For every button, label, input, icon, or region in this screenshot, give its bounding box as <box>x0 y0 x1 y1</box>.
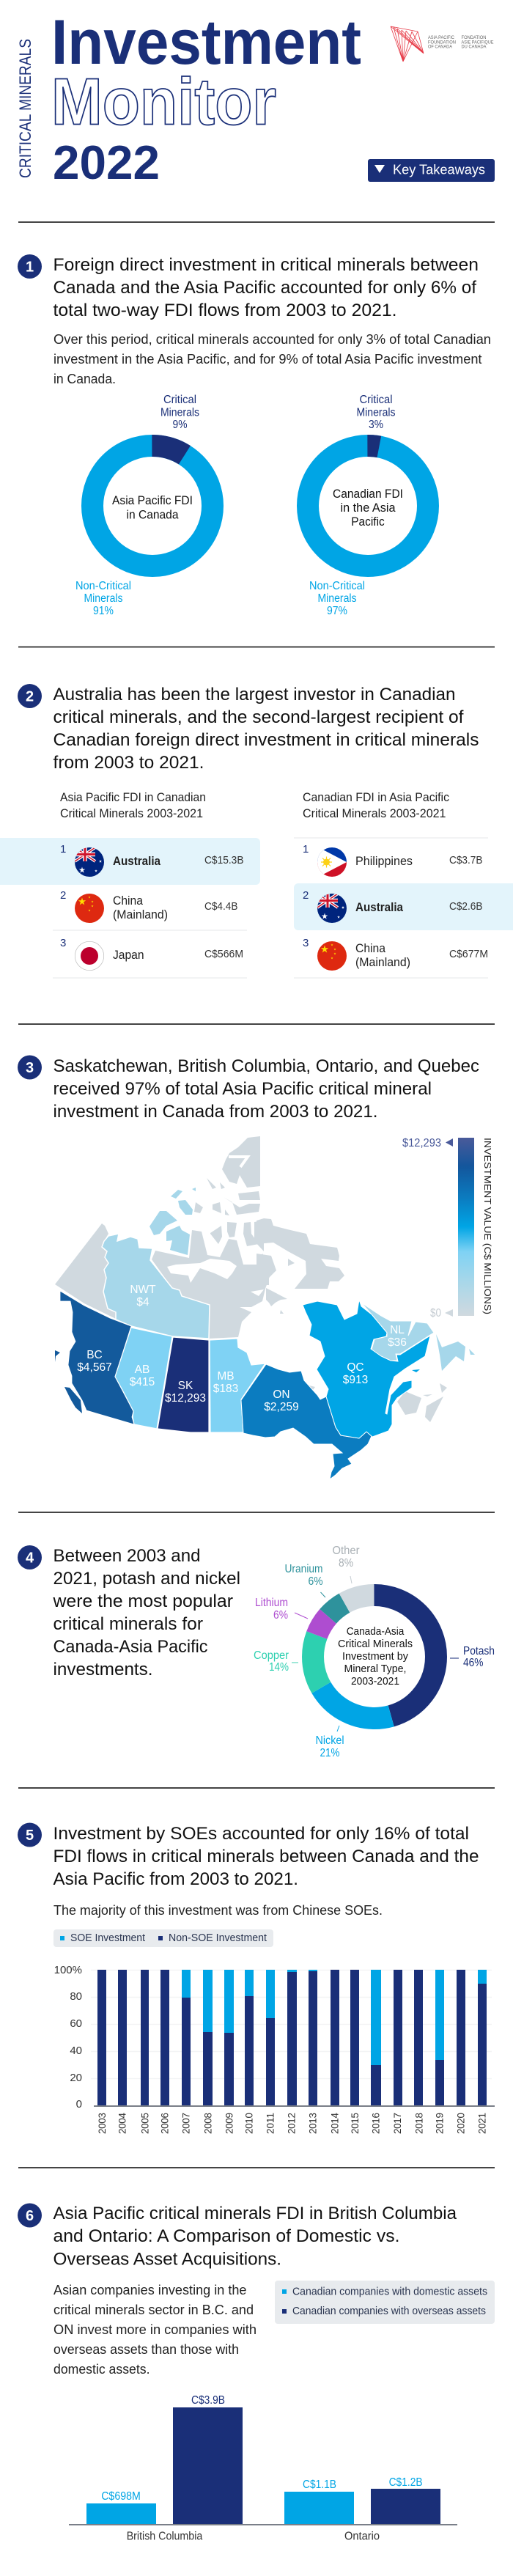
province: Alberta <box>115 1328 172 1429</box>
label: other: 8% <box>339 1557 353 1569</box>
heading 5: FDI flows in critical minerals between Canada and the <box>53 1847 479 1866</box>
map value labels: QC <box>347 1361 364 1374</box>
heading 3 <box>53 1056 479 1122</box>
ranking table: Asia Pacific FDI in Canadian critical minerals: C$15.3B <box>204 854 243 866</box>
stacked bar chart: SOE share by year: 2015 <box>350 2113 361 2134</box>
number badge 3: 3 <box>26 1060 34 1076</box>
province: Ontario <box>241 1364 372 1479</box>
heading 1: total two-way FDI flows from 2003 to 2021. <box>53 301 397 320</box>
label: uranium: Uranium <box>284 1563 322 1575</box>
ranking table: Asia Pacific FDI in Canadian critical minerals: C$4.4B <box>204 900 237 913</box>
heading 1 <box>53 255 479 320</box>
stacked bar chart: SOE share by year: 2016 <box>371 2113 381 2134</box>
body text 6: domestic assets. <box>53 2362 150 2377</box>
heading 3: investment in Canada from 2003 to 2021. <box>53 1102 378 1122</box>
ranking table: Asia Pacific FDI in Canadian critical minerals: China <box>113 894 144 908</box>
bar chart: BC and Ontario: British Columbia <box>127 2531 203 2542</box>
ranking table: Asia Pacific FDI in Canadian critical minerals: Asia Pacific FDI in Canadian <box>60 790 206 804</box>
stacked bar chart: SOE share by year: 20 <box>70 2072 82 2084</box>
label: potash: Potash <box>463 1645 495 1657</box>
body text 6 <box>53 2283 256 2377</box>
heading 2 <box>53 685 479 773</box>
number badge 1: 1 <box>26 260 34 276</box>
label: copper: 14% <box>269 1661 289 1674</box>
province: British Columbia <box>55 1291 134 1424</box>
map value labels: $12,293 <box>165 1392 206 1405</box>
panel: section 2 top investors <box>0 684 513 979</box>
stacked bar chart: SOE share by year <box>54 1964 495 2134</box>
heading 5: Asia Pacific from 2003 to 2021. <box>53 1869 298 1889</box>
donut chart: Asia Pacific FDI in Canada <box>75 394 213 617</box>
heading 2: from 2003 to 2021. <box>53 753 204 773</box>
heading 4: 2021, potash and nickel <box>53 1569 240 1589</box>
number badge 4 <box>18 1545 42 1569</box>
vertical label: critical minerals: CRITICAL MINERALS <box>16 39 34 178</box>
donut chart: Canadian FDI in the Asia Pacific <box>308 394 428 617</box>
stacked bar chart: SOE share by year: 2012 <box>286 2113 298 2134</box>
label: copper <box>254 1649 298 1674</box>
panel: section 5 SOE investment <box>18 1822 495 2134</box>
map value labels <box>77 1284 407 1413</box>
map value labels: $4 <box>136 1296 150 1309</box>
map value labels: $415 <box>130 1376 155 1388</box>
flag: China <box>317 941 347 971</box>
flag: Philippines <box>317 847 347 877</box>
body text 1: in Canada. <box>53 372 116 386</box>
body text 1: investment in the Asia Pacific, and for 9% of total Asia Pacific investment <box>53 352 482 367</box>
heading 4: Canada-Asia Pacific <box>53 1637 208 1657</box>
stacked bar chart: SOE share by year: 2003 <box>97 2113 108 2134</box>
map value labels: $2,259 <box>264 1401 299 1413</box>
heading 6: and Ontario: A Comparison of Domestic vs. <box>53 2226 400 2246</box>
ranking table: Canadian FDI in Asia Pacific critical minerals: C$2.6B <box>449 900 482 913</box>
map of Canada <box>55 1136 475 1479</box>
stacked bar chart: SOE share by year: 2017 <box>392 2113 403 2134</box>
label: potash: 46% <box>463 1657 484 1669</box>
legend: investment value colour scale: $0 <box>430 1307 441 1320</box>
stacked bar chart: SOE share by year: 80 <box>70 1990 82 2003</box>
logo: Asia Pacific Foundation of Canada: FOUNDATION <box>428 40 456 45</box>
flag: Japan <box>75 941 104 971</box>
logo: Asia Pacific Foundation of Canada: ASIA PACIFIC <box>428 35 454 40</box>
legend: SOE vs non-SOE: SOE Investment <box>70 1932 146 1944</box>
legend: domestic vs overseas assets <box>275 2281 495 2324</box>
map value labels: $36 <box>388 1336 407 1349</box>
flag: Australia <box>75 847 104 877</box>
map value labels: NL <box>390 1324 405 1336</box>
ranking table: Canadian FDI in Asia Pacific critical minerals: Canadian FDI in Asia Pacific <box>303 790 449 804</box>
title: 2022: 2022 <box>53 136 160 189</box>
stacked bar chart: SOE share by year: 2010 <box>243 2113 255 2134</box>
donut chart: Canadian FDI in the Asia Pacific: Canadian FDI <box>333 487 403 501</box>
donut chart: Canadian FDI in the Asia Pacific: in the Asia <box>340 501 396 515</box>
panel: section 1 foreign direct investment <box>18 254 491 617</box>
donut chart: investment by mineral type: Mineral Type, <box>344 1663 406 1675</box>
heading 4 <box>52 1546 240 1679</box>
heading 4: Between 2003 and <box>53 1546 201 1566</box>
donut chart: Asia Pacific FDI in Canada: Non-Critical <box>75 580 131 592</box>
heading 3: received 97% of total Asia Pacific critical mineral <box>53 1079 432 1099</box>
stacked bar chart: SOE share by year: 2005 <box>139 2113 151 2134</box>
logo: Asia Pacific Foundation of Canada: DU CANADA <box>462 44 487 50</box>
legend: domestic vs overseas assets: Canadian companies with overseas assets <box>292 2305 486 2317</box>
ranking table: Asia Pacific FDI in Canadian critical minerals: Australia <box>113 855 161 868</box>
donut chart: Canadian FDI in the Asia Pacific: 3% <box>369 419 383 431</box>
label: copper: Copper <box>254 1649 289 1662</box>
number badge 3 <box>18 1056 42 1079</box>
number badge 6 <box>18 2204 42 2227</box>
heading 1: Canada and the Asia Pacific accounted for only 6% of <box>53 278 476 298</box>
donut chart: Canadian FDI in the Asia Pacific: Minerals <box>318 592 357 605</box>
ranking table: Canadian FDI in Asia Pacific critical minerals: Philippines <box>355 855 413 868</box>
stacked bar chart: SOE share by year: 2011 <box>265 2113 276 2134</box>
ranking table: Canadian FDI in Asia Pacific critical minerals: C$677M <box>449 948 488 960</box>
bar chart: BC and Ontario: C$3.9B <box>191 2394 225 2407</box>
heading 2: critical minerals, and the second-largest recipient of <box>53 707 464 727</box>
legend: SOE vs non-SOE <box>53 1929 273 1947</box>
stacked bar chart: SOE share by year: 2004 <box>117 2113 128 2134</box>
map value labels: BC <box>86 1349 103 1361</box>
province: Manitoba <box>210 1339 265 1432</box>
body text 6: overseas assets than those with <box>53 2342 239 2357</box>
ranking table: Asia Pacific FDI in Canadian critical minerals: Critical Minerals 2003-2021 <box>60 806 203 820</box>
donut chart: investment by mineral type: Investment by <box>342 1650 408 1663</box>
ranking table: Canadian FDI in Asia Pacific critical minerals <box>294 790 513 979</box>
label: lithium: Lithium <box>255 1597 288 1609</box>
bar chart: BC and Ontario <box>69 2394 457 2542</box>
heading 2: Canadian foreign direct investment in critical minerals <box>53 730 479 750</box>
legend: investment value colour scale: INVESTMENT VALUE (C$ MILLIONS) <box>482 1138 493 1314</box>
stacked bar chart: SOE share by year: 2009 <box>224 2113 235 2134</box>
legend: SOE vs non-SOE: Non-SOE Investment <box>169 1932 267 1944</box>
ranking table: Canadian FDI in Asia Pacific critical minerals: C$3.7B <box>449 854 482 866</box>
ranking table: Asia Pacific FDI in Canadian critical minerals: Japan <box>113 949 144 962</box>
donut chart: Asia Pacific FDI in Canada: in Canada <box>126 507 179 522</box>
body text 6: Asian companies investing in the <box>53 2283 246 2297</box>
territories without investment: Yukon, Nunavut and Atlantic provinces <box>55 1136 447 1422</box>
stacked bar chart: SOE share by year: 60 <box>70 2017 82 2030</box>
label: nickel <box>315 1726 344 1759</box>
ranking table: Asia Pacific FDI in Canadian critical minerals: C$566M <box>204 948 243 960</box>
donut chart: investment by mineral type: 2003-2021 <box>351 1675 399 1688</box>
label: potash <box>450 1645 495 1669</box>
label: other: Other <box>333 1545 359 1557</box>
heading 6 <box>53 2204 457 2270</box>
title: Monitor outlined: Monitor <box>51 66 276 139</box>
bar chart: BC and Ontario: Ontario <box>344 2531 380 2542</box>
button: key takeaways <box>368 159 495 182</box>
map value labels: $913 <box>343 1374 368 1386</box>
donut chart: Canadian FDI in the Asia Pacific: Critical <box>359 394 393 406</box>
stacked bar chart: SOE share by year: 2006 <box>160 2113 170 2134</box>
map value labels: $183 <box>213 1383 238 1395</box>
number badge 1 <box>18 254 42 279</box>
legend: investment value colour scale: $12,293 <box>402 1137 441 1149</box>
panel: section 4 mineral types <box>18 1545 495 1759</box>
logo: Asia Pacific Foundation of Canada: FONDATION <box>462 35 487 40</box>
donut chart: investment by mineral type: Critical Minerals <box>338 1638 413 1650</box>
number badge 2 <box>18 684 42 708</box>
legend: domestic vs overseas assets: Canadian companies with domestic assets <box>292 2286 487 2297</box>
ranking table: Canadian FDI in Asia Pacific critical minerals: (Mainland) <box>355 956 410 969</box>
heading 3: Saskatchewan, British Columbia, Ontario, and Quebec <box>53 1056 479 1076</box>
heading 2: Australia has been the largest investor in Canadian <box>53 685 456 704</box>
donut chart: Canadian FDI in the Asia Pacific: Non-Critical <box>309 580 365 592</box>
map value labels: $4,567 <box>77 1361 112 1374</box>
row highlight Australia <box>294 883 513 930</box>
button: key takeaways: Key Takeaways <box>393 163 485 177</box>
province: Newfoundland and Labrador <box>361 1303 475 1371</box>
stacked bar chart: SOE share by year: 0 <box>76 2098 82 2111</box>
province: Northwest Territories <box>102 1188 210 1339</box>
ranking table: Asia Pacific FDI in Canadian critical minerals: 2 <box>60 889 66 902</box>
stacked bar chart: SOE share by year: 40 <box>70 2045 82 2057</box>
stacked bar chart: SOE share by year: 2013 <box>308 2113 318 2134</box>
body text 6: ON invest more in companies with <box>53 2322 256 2337</box>
ranking table: Canadian FDI in Asia Pacific critical minerals: Australia <box>355 901 404 914</box>
stacked bar chart: SOE share by year: 2019 <box>434 2113 446 2134</box>
label: lithium <box>255 1597 308 1622</box>
number badge 5 <box>18 1822 42 1847</box>
flag: Australia <box>317 894 347 923</box>
number badge 2: 2 <box>26 689 34 705</box>
heading 6: Overseas Asset Acquisitions. <box>53 2249 281 2270</box>
donut chart: Asia Pacific FDI in Canada: Asia Pacific FDI <box>112 493 193 507</box>
body text 5: The majority of this investment was from Chinese SOEs. <box>53 1903 383 1918</box>
ranking table: Canadian FDI in Asia Pacific critical minerals: 1 <box>303 843 309 855</box>
donut chart: Asia Pacific FDI in Canada: Critical <box>163 394 196 406</box>
map value labels: MB <box>217 1370 235 1383</box>
stacked bar chart: SOE share by year: 2007 <box>180 2113 192 2134</box>
label: other <box>333 1545 359 1583</box>
body text 6: critical minerals sector in B.C. and <box>53 2303 254 2317</box>
ranking table: Canadian FDI in Asia Pacific critical minerals: Critical Minerals 2003-2021 <box>303 806 446 820</box>
ranking table: Canadian FDI in Asia Pacific critical minerals: 2 <box>303 889 309 902</box>
donut chart: investment by mineral type: Canada-Asia <box>347 1625 405 1638</box>
label: uranium <box>284 1563 325 1597</box>
flag: China <box>75 894 104 923</box>
heading 5: Investment by SOEs accounted for only 16% of total <box>53 1824 469 1844</box>
heading 4: investments. <box>53 1660 152 1679</box>
province: Saskatchewan <box>158 1337 209 1432</box>
stacked bar chart: SOE share by year: 2018 <box>413 2113 425 2134</box>
body text 1: Over this period, critical minerals accounted for only 3% of total Canadian <box>53 332 491 347</box>
logo: Asia Pacific Foundation of Canada: OF CANADA <box>428 44 453 50</box>
panel: section 6 domestic vs overseas <box>18 2204 495 2542</box>
heading 4: critical minerals for <box>53 1614 203 1634</box>
map value labels: SK <box>178 1380 193 1392</box>
stacked bar chart: SOE share by year: 2014 <box>330 2113 340 2134</box>
bar chart: BC and Ontario: C$1.2B <box>389 2476 423 2489</box>
panel: section 3 provinces map <box>18 1056 493 1479</box>
ranking table: Asia Pacific FDI in Canadian critical minerals <box>0 790 260 979</box>
stacked bar chart: SOE share by year: 2008 <box>202 2113 214 2134</box>
map value labels: AB <box>135 1364 150 1376</box>
stacked bar chart: SOE share by year: 2021 <box>476 2113 488 2134</box>
donut chart: Canadian FDI in the Asia Pacific: 97% <box>327 605 347 617</box>
stacked bar chart: SOE share by year: 2020 <box>456 2113 466 2134</box>
number badge 6: 6 <box>26 2208 34 2224</box>
map value labels: ON <box>273 1388 290 1401</box>
heading 6: Asia Pacific critical minerals FDI in British Columbia <box>53 2204 457 2223</box>
label: nickel: Nickel <box>315 1734 344 1747</box>
donut chart: Canadian FDI in the Asia Pacific: Pacific <box>351 515 385 529</box>
map value labels: NWT <box>130 1284 156 1296</box>
logo: Asia Pacific Foundation of Canada <box>391 26 494 62</box>
panel: header <box>16 7 495 189</box>
heading 5 <box>53 1824 479 1889</box>
ranking table: Canadian FDI in Asia Pacific critical minerals: 3 <box>303 937 309 949</box>
label: lithium: 6% <box>273 1609 288 1622</box>
donut chart: Canadian FDI in the Asia Pacific: Minerals <box>356 406 396 419</box>
number badge 5: 5 <box>26 1828 34 1844</box>
heading 1: Foreign direct investment in critical minerals between <box>53 255 479 275</box>
title: Investment: Investment <box>51 7 361 78</box>
stacked bar chart: SOE share by year: 100% <box>54 1964 82 1976</box>
logo: Asia Pacific Foundation of Canada: ASIE PACIFIQUE <box>462 40 494 45</box>
number badge 4: 4 <box>26 1550 34 1566</box>
heading 4: were the most popular <box>52 1591 233 1611</box>
donut chart: Asia Pacific FDI in Canada: 91% <box>93 605 114 617</box>
legend: investment value colour scale <box>402 1137 493 1320</box>
donut chart: investment by mineral type <box>254 1545 495 1759</box>
bar chart: BC and Ontario: C$1.1B <box>303 2479 336 2491</box>
ranking table: Canadian FDI in Asia Pacific critical minerals: China <box>355 942 386 955</box>
body text 1 <box>53 332 491 386</box>
donut chart: Asia Pacific FDI in Canada: 9% <box>173 419 188 431</box>
label: uranium: 6% <box>308 1575 323 1588</box>
ranking table: Asia Pacific FDI in Canadian critical minerals: 3 <box>60 937 66 949</box>
bar chart: BC and Ontario: C$698M <box>101 2490 141 2503</box>
donut chart: Asia Pacific FDI in Canada: Minerals <box>84 592 123 605</box>
ranking table: Asia Pacific FDI in Canadian critical minerals: (Mainland) <box>113 908 168 921</box>
row highlight Australia <box>0 838 260 885</box>
label: nickel: 21% <box>320 1747 340 1759</box>
province: Quebec <box>303 1300 430 1438</box>
ranking table: Asia Pacific FDI in Canadian critical minerals: 1 <box>60 843 66 855</box>
donut chart: Asia Pacific FDI in Canada: Minerals <box>160 406 199 419</box>
